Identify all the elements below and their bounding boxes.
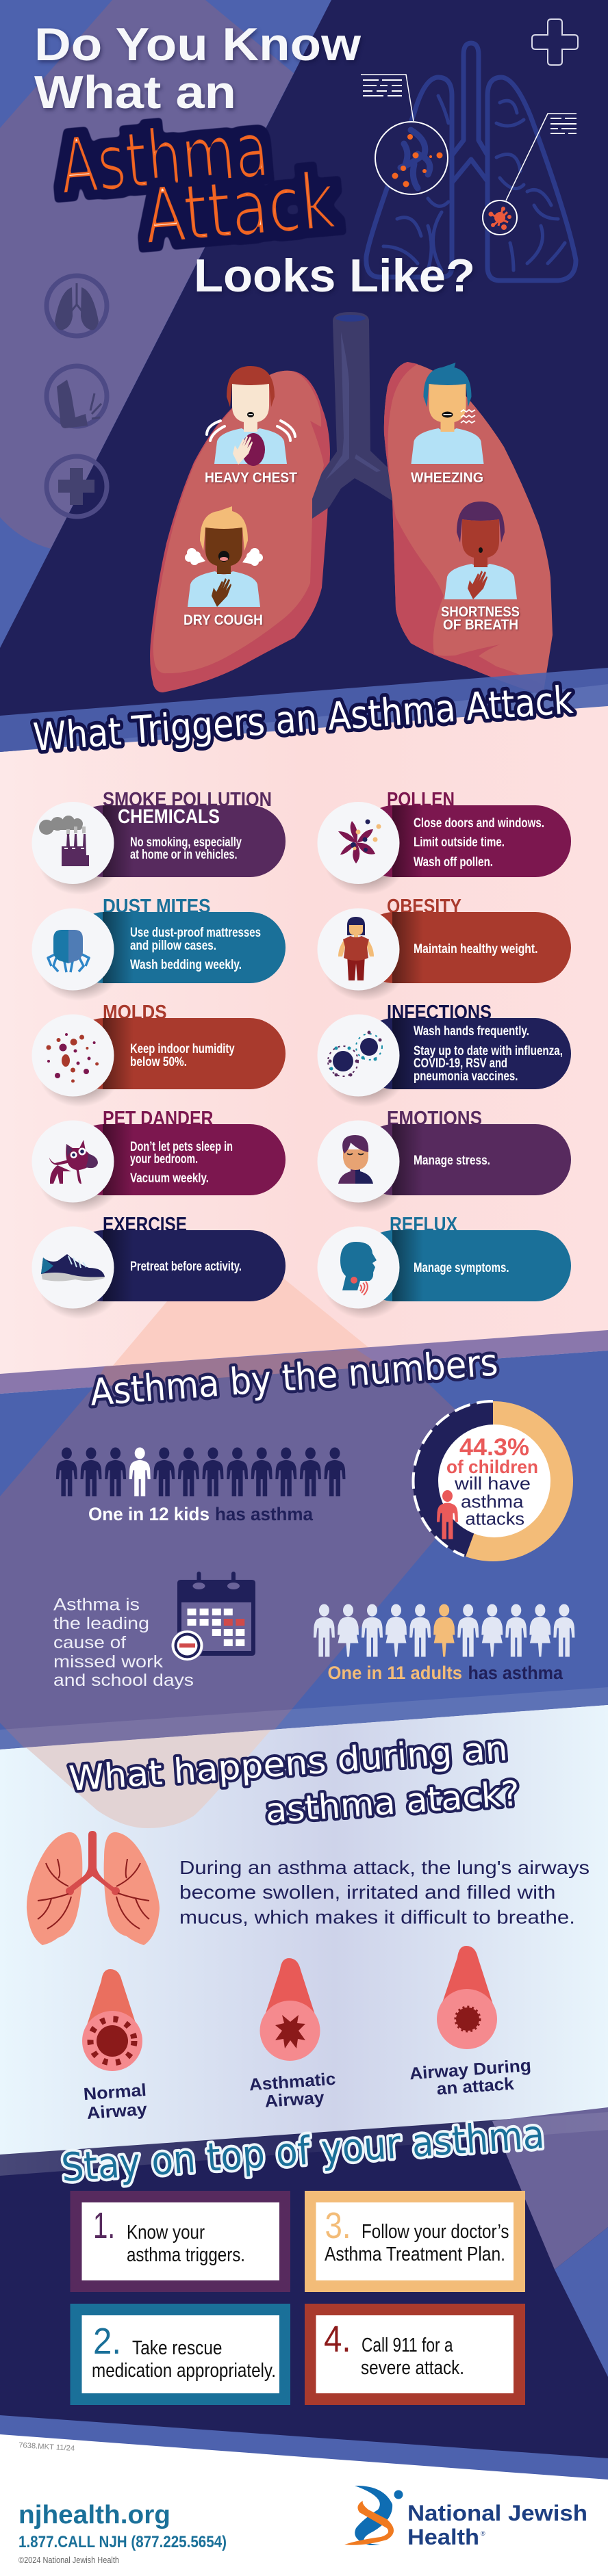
label: asthmatic airway xyxy=(249,2070,338,2112)
panel: step 3 xyxy=(305,2191,525,2292)
panel: step 4: Call 911 for a xyxy=(362,2334,453,2356)
background: footer band xyxy=(0,2415,608,2480)
logo: national jewish health xyxy=(344,2486,587,2549)
logo: national jewish health: Health xyxy=(407,2525,479,2549)
text: explanation: mucus, which makes it difficult to breathe. xyxy=(179,1906,575,1928)
background: numbers lower band xyxy=(0,1687,608,1749)
chart: twelve kids pictogram xyxy=(56,1448,346,1496)
background: triggers band xyxy=(0,668,608,752)
panel: step 1: Know your xyxy=(127,2222,205,2243)
title: asthma: Asthma xyxy=(56,105,272,212)
caption: one in 12 kids: has asthma xyxy=(215,1504,314,1524)
illustration: right lung xyxy=(384,362,553,695)
panel: exercise xyxy=(31,1214,286,1319)
icon: lungs badge xyxy=(47,276,107,336)
minus badge xyxy=(171,1630,204,1661)
title: looks like: Looks Like? xyxy=(194,250,475,302)
text: leading cause: the leading xyxy=(53,1614,149,1633)
label: airway during attack xyxy=(409,2056,533,2100)
icon: head profile xyxy=(340,1242,377,1295)
icon: calendar xyxy=(171,1574,255,1661)
panel: step 3: Asthma Treatment Plan. xyxy=(325,2243,505,2265)
icon: stressed person xyxy=(338,1135,373,1184)
panel: pet dander: your bedroom. xyxy=(130,1152,198,1167)
icon: plus outline xyxy=(532,19,578,65)
panel: dust mites: DUST MITES xyxy=(103,896,211,918)
shirt xyxy=(214,428,287,464)
panel: smoke pollution chemicals: at home or in vehicles. xyxy=(130,848,237,862)
chart: donut 44.3 percent: of children xyxy=(446,1457,538,1477)
panel: exercise: Pretreat before activity. xyxy=(130,1260,242,1274)
panel: pet dander: Vacuum weekly. xyxy=(130,1171,209,1186)
background: numbers top band xyxy=(0,1330,608,1394)
text: CHEMICALS xyxy=(118,806,220,828)
background: header blue wedge xyxy=(0,0,331,648)
person: dry cough xyxy=(183,506,263,628)
caption: one in 11 adults: has asthma xyxy=(468,1663,563,1683)
text: explanation xyxy=(179,1857,590,1928)
panel: reflux xyxy=(318,1214,571,1319)
icon: flower xyxy=(338,820,381,863)
panel: infections: pneumonia vaccines. xyxy=(414,1069,518,1084)
panel: exercise: EXERCISE xyxy=(103,1214,187,1236)
icon: lungs xyxy=(27,1831,160,1945)
label: DRY COUGH xyxy=(183,612,263,628)
label: SHORTNESS xyxy=(441,604,520,620)
logo mark xyxy=(344,2486,403,2545)
chart: donut 44.3 percent: asthma xyxy=(461,1492,524,1512)
donut text: 44.3% xyxy=(459,1434,529,1461)
background: header purple shape xyxy=(0,0,294,549)
chart: donut 44.3 percent: attacks xyxy=(466,1508,524,1528)
panel: step 1: 1. xyxy=(93,2205,115,2246)
icon: outlined lungs with callouts xyxy=(361,43,577,281)
panel: obesity: OBESITY xyxy=(387,896,461,918)
chart: donut 44.3 percent: will have xyxy=(454,1473,531,1494)
illustration: left lung xyxy=(150,371,330,692)
background: numbers section xyxy=(0,1351,608,1749)
panel: emotions: Manage stress. xyxy=(414,1154,490,1168)
panel: pet dander: PET DANDER xyxy=(103,1108,214,1130)
logo: national jewish health: National Jewish xyxy=(407,2501,587,2525)
label: asthmatic airway: Asthmatic xyxy=(249,2070,336,2094)
text: leading cause: missed work xyxy=(53,1652,164,1671)
background: numbers purple shape xyxy=(0,1364,505,1758)
title: what an: What an xyxy=(34,66,236,118)
person: heavy chest xyxy=(205,366,297,486)
icon: mold spores xyxy=(47,1033,99,1082)
panel: infections xyxy=(318,1002,571,1107)
panel: infections: Wash hands frequently. xyxy=(414,1024,529,1039)
panel: pet dander: Don’t let pets sleep in xyxy=(130,1140,233,1154)
heading: what happens: What happens during an xyxy=(68,1728,509,1799)
red figure xyxy=(437,1490,458,1539)
panel: step 4: severe attack. xyxy=(361,2357,464,2379)
panel: infections: COVID-19, RSV and xyxy=(414,1056,507,1071)
icon: viruses xyxy=(328,1030,382,1077)
icon: airway during attack xyxy=(437,1946,497,2049)
logo: national jewish health: ® xyxy=(481,2530,485,2537)
panel: pollen: Limit outside time. xyxy=(414,835,505,850)
icon: normal airway xyxy=(82,1969,142,2071)
background: numbers top band tint xyxy=(94,1349,383,1387)
panel: infections: INFECTIONS xyxy=(387,1002,492,1024)
background: header navy xyxy=(0,0,608,753)
background: action purple shape xyxy=(492,2107,608,2269)
lung outline xyxy=(366,43,576,281)
person: wheezing xyxy=(411,363,483,486)
label: WHEEZING xyxy=(411,470,483,486)
chart: eleven adults pictogram xyxy=(314,1604,574,1657)
background: action band xyxy=(0,2112,608,2176)
icon: person xyxy=(338,917,374,980)
panel: step 1 xyxy=(70,2191,290,2292)
heading: stay on top: Stay on top of your asthma xyxy=(60,2112,546,2191)
panel: step 2: medication appropriately. xyxy=(92,2360,276,2382)
text: explanation: become swollen, irritated and filled with xyxy=(179,1882,556,1903)
panel: dust mites xyxy=(31,896,286,1001)
panel: dust mites: Wash bedding weekly. xyxy=(130,958,242,972)
background: airway section xyxy=(0,1705,608,2155)
label: airway during attack: an attack xyxy=(436,2074,515,2098)
text: explanation: During an asthma attack, the lung's airways xyxy=(179,1857,590,1878)
panel: step 1: asthma triggers. xyxy=(127,2244,245,2266)
panel: dust mites: Use dust-proof mattresses xyxy=(130,926,261,940)
illustration: trachea xyxy=(312,312,392,519)
label: airway during attack: Airway During xyxy=(409,2056,532,2083)
heading: what happens xyxy=(68,1728,521,1831)
text: leading cause: and school days xyxy=(53,1671,194,1690)
panel: emotions: EMOTIONS xyxy=(387,1108,482,1130)
label: HEAVY CHEST xyxy=(205,470,297,486)
caption: one in 12 kids: One in 12 kids xyxy=(88,1504,210,1524)
panel: molds xyxy=(31,1002,286,1107)
panel: pollen: Close doors and windows. xyxy=(414,816,544,831)
panel: pollen xyxy=(318,789,571,895)
title: attack: Attack xyxy=(140,157,339,262)
text: job code: 7638.MKT 11/24 xyxy=(18,2441,75,2453)
text: leading cause: Asthma is xyxy=(53,1596,140,1615)
callout circle: mucus xyxy=(361,75,448,194)
icon: factory xyxy=(39,816,89,866)
panel: pollen: POLLEN xyxy=(387,789,455,811)
panel: molds: below 50%. xyxy=(130,1055,187,1069)
text: copyright: ©2024 National Jewish Health xyxy=(18,2555,119,2565)
panel: step 2: 2. xyxy=(93,2321,121,2362)
panel: smoke pollution chemicals xyxy=(31,789,286,895)
heading: what happens: asthma atack? xyxy=(264,1773,521,1831)
label: normal airway: Airway xyxy=(86,2100,148,2123)
caption: one in 11 adults xyxy=(327,1663,563,1683)
text: leading cause xyxy=(53,1596,194,1690)
panel: obesity xyxy=(318,896,571,1001)
panel: molds: Keep indoor humidity xyxy=(130,1042,235,1056)
icon: plus badge xyxy=(47,456,107,517)
panel: smoke pollution chemicals: No smoking, especially xyxy=(130,835,242,850)
text: phone: 1.877.CALL NJH (877.225.5654) xyxy=(18,2533,227,2551)
caption: one in 12 kids xyxy=(88,1504,314,1524)
panel: dust mites: and pillow cases. xyxy=(130,939,216,953)
panel: step 4 xyxy=(305,2304,525,2405)
chart: donut 44.3 percent xyxy=(413,1401,573,1561)
panel: step 3: 3. xyxy=(325,2205,351,2246)
panel: reflux: REFLUX xyxy=(390,1214,458,1236)
icon: asthmatic airway xyxy=(260,1958,320,2061)
icon: mite xyxy=(48,930,89,972)
title: SMOKE POLLUTION xyxy=(103,789,272,811)
title: do you know: Do You Know xyxy=(34,18,362,70)
panel: pet dander xyxy=(31,1108,286,1213)
person: shortness of breath: OF BREATH xyxy=(443,617,518,633)
label: normal airway xyxy=(83,2081,149,2123)
panel: step 3: Follow your doctor’s xyxy=(362,2221,509,2243)
panel: reflux: Manage symptoms. xyxy=(414,1261,509,1275)
caption: one in 11 adults: One in 11 adults xyxy=(327,1663,462,1683)
heading: asthma by the numbers: Asthma by the numbers xyxy=(88,1340,499,1414)
panel: step 2 xyxy=(70,2304,290,2405)
icon: shoe xyxy=(41,1254,105,1281)
panel: obesity: Maintain healthy weight. xyxy=(414,942,538,957)
panel: molds: MOLDS xyxy=(103,1002,167,1024)
panel: step 4: 4. xyxy=(324,2319,351,2360)
label: normal airway: Normal xyxy=(83,2081,147,2104)
panel: pollen: Wash off pollen. xyxy=(414,855,493,870)
text: website: njhealth.org xyxy=(18,2501,170,2529)
callout circle: virus xyxy=(483,114,577,235)
background: peach wedge xyxy=(105,1232,383,1375)
panel: step 2: Take rescue xyxy=(132,2337,222,2359)
background: action section navy xyxy=(0,2112,608,2463)
label: asthmatic airway: Airway xyxy=(264,2088,325,2111)
icon: dog xyxy=(49,1140,98,1184)
background: airway peach shape xyxy=(26,1730,271,1828)
panel: emotions xyxy=(318,1108,571,1213)
person: shortness of breath xyxy=(441,502,520,633)
text: leading cause: cause of xyxy=(53,1633,126,1652)
icon: inhaler badge xyxy=(47,366,107,428)
background: triggers section xyxy=(0,706,608,1396)
panel: infections: Stay up to date with influenza, xyxy=(414,1044,563,1058)
background: action blue shape xyxy=(555,2227,608,2377)
